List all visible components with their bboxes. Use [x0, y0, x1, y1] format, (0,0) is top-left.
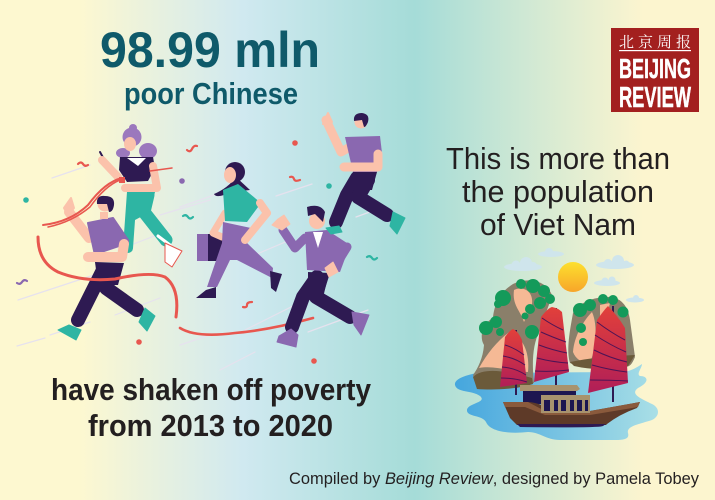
woman with briefcase — [196, 162, 282, 298]
masts — [516, 306, 613, 402]
line 1: This is more than — [446, 141, 670, 176]
boat — [503, 385, 640, 427]
line 2: from 2013 to 2020 — [88, 408, 333, 443]
sun — [558, 262, 588, 292]
right rock — [568, 294, 635, 369]
man running top right — [323, 113, 405, 234]
subtitle: poor Chinese: poor Chinese — [124, 76, 298, 111]
line 2: the population — [462, 174, 654, 209]
illustration: Ha Long Bay junk boat — [455, 248, 658, 440]
line 3: of Viet Nam — [480, 207, 636, 242]
red ribbon — [38, 168, 313, 335]
illustration: runners — [17, 113, 405, 370]
logo: Beijing Review — [611, 28, 699, 114]
left rock — [473, 279, 555, 389]
running man in purple t-shirt — [58, 196, 155, 340]
sail battens — [501, 318, 628, 382]
logo chinese name: 北京周报 — [619, 31, 691, 52]
line 1: have shaken off poverty — [51, 372, 372, 407]
confetti squiggles — [17, 146, 377, 307]
sea — [455, 364, 658, 440]
sails — [500, 306, 628, 393]
comparison text — [446, 141, 670, 242]
motion lines — [17, 165, 378, 370]
woman with phone — [100, 124, 182, 267]
confetti dots — [23, 140, 332, 364]
clouds — [504, 248, 644, 302]
man in purple jacket — [272, 206, 369, 347]
credit line: Compiled by Beijing Review, designed by Pamela Tobey — [289, 469, 699, 488]
bottom headline — [51, 372, 372, 443]
title: 98.99 mln: 98.99 mln — [100, 22, 320, 78]
